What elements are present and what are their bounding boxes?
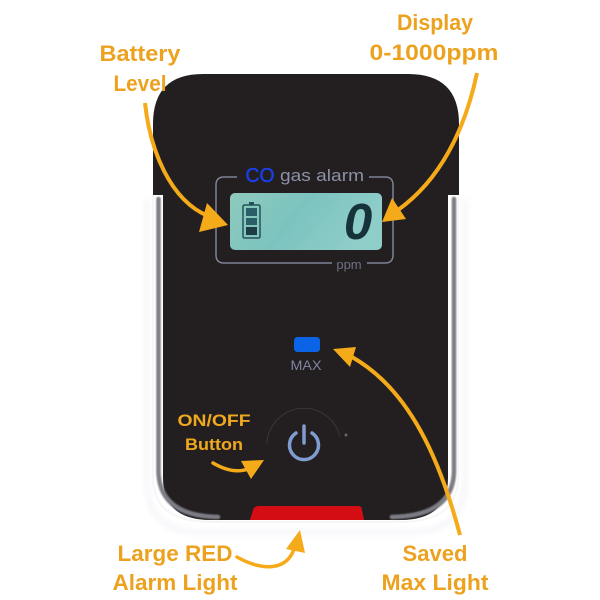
metal side rails xyxy=(153,197,458,522)
label: saved max light xyxy=(382,541,489,595)
label: battery level xyxy=(100,41,181,96)
panel: display xyxy=(216,165,393,272)
label: saved max light: Max Light xyxy=(382,570,489,595)
device black body xyxy=(153,74,459,520)
arrow: alarm light xyxy=(237,530,305,567)
white case with soft shadow xyxy=(147,200,465,532)
icon: power xyxy=(290,426,318,460)
label: MAX: MAX xyxy=(290,357,322,373)
digit zero: 0 xyxy=(344,193,372,250)
arrow: battery level xyxy=(145,103,228,232)
label: saved max light: Saved xyxy=(402,541,468,566)
label: ppm: ppm xyxy=(336,257,362,272)
label: battery level: Level xyxy=(114,71,166,96)
label: on/off button: ON/OFF xyxy=(178,411,250,430)
arrow: on/off button xyxy=(213,460,264,479)
label: display range: Display xyxy=(397,10,474,35)
arrow: saved max light xyxy=(333,347,460,535)
label: CO: CO xyxy=(246,165,274,187)
blue MAX LED xyxy=(294,337,320,352)
red alarm light xyxy=(250,506,364,520)
power button xyxy=(267,408,348,460)
label: large red alarm light: Alarm Light xyxy=(112,570,238,595)
icon: battery xyxy=(243,202,260,238)
label: battery level: Battery xyxy=(100,41,181,66)
label: display range xyxy=(370,10,498,65)
display bracket outline xyxy=(216,177,393,263)
label: on/off button: Button xyxy=(185,435,243,454)
arrow: display xyxy=(382,73,477,222)
label: display range: 0-1000ppm xyxy=(370,40,498,65)
LCD screen xyxy=(230,193,382,250)
label: on/off button xyxy=(178,411,250,454)
label: gas alarm: gas alarm xyxy=(280,166,364,185)
label: large red alarm light xyxy=(112,541,238,595)
label: large red alarm light: Large RED xyxy=(118,541,232,566)
